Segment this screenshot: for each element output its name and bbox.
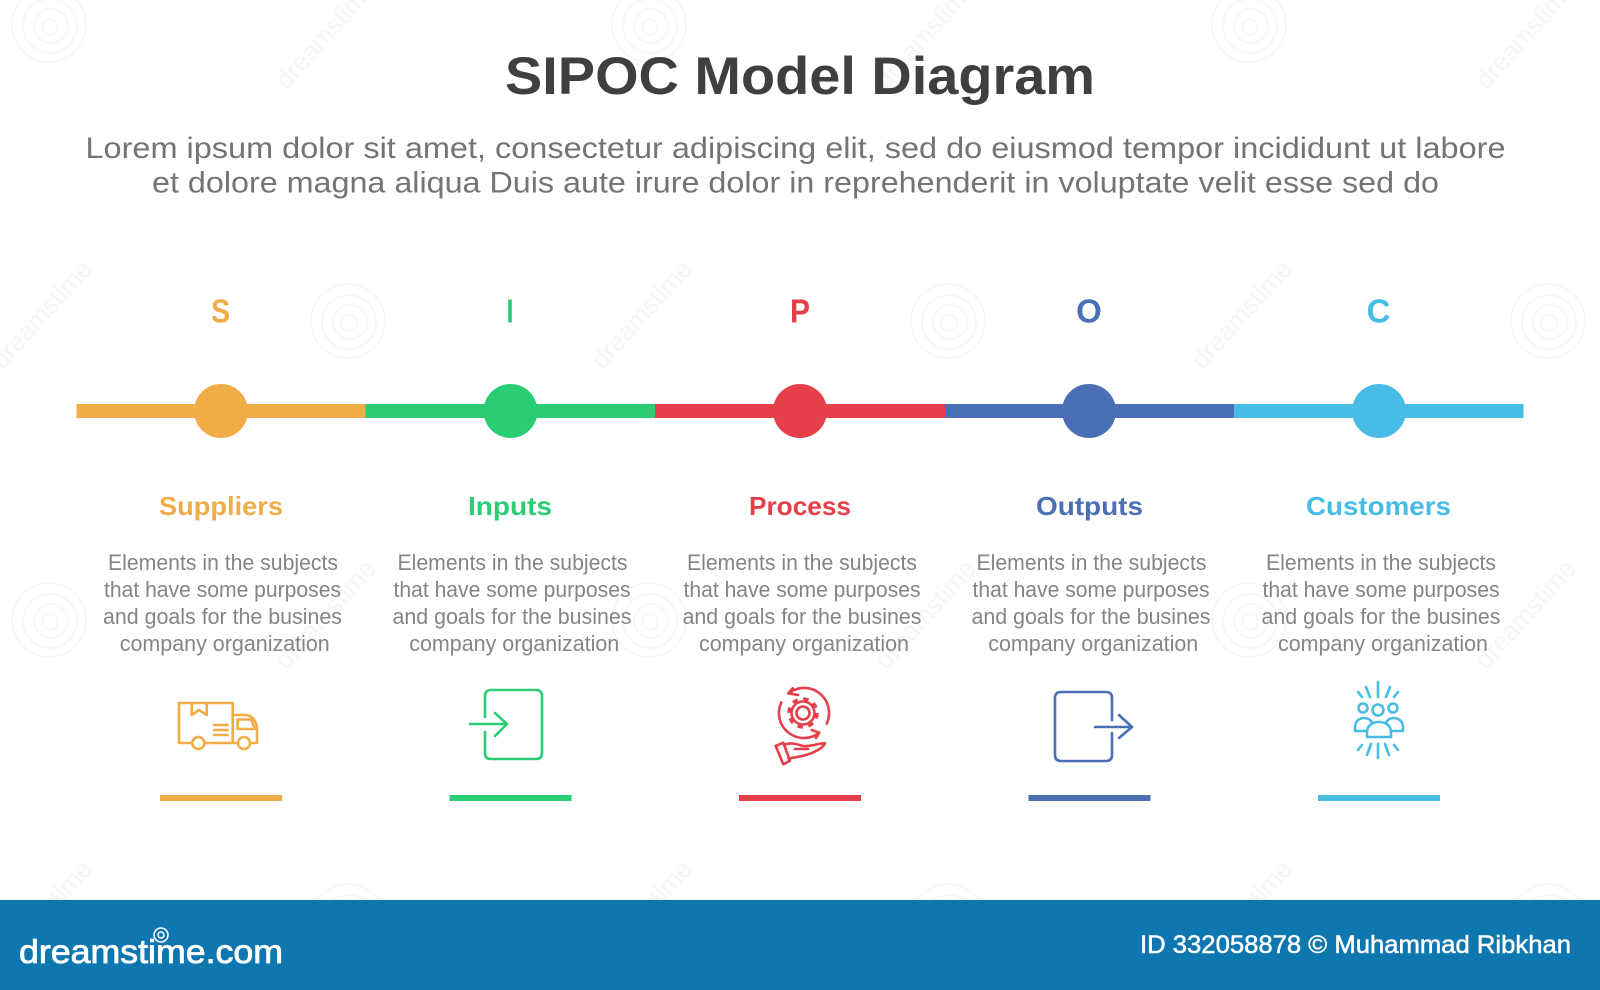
letter O: O	[1076, 292, 1102, 330]
watermark pattern: dreamstime	[1185, 253, 1298, 374]
heading: Suppliers: Suppliers	[159, 491, 283, 521]
title: SIPOC Model Diagram	[505, 47, 1095, 106]
subtitle text block: Lorem ipsum dolor sit amet, consectetur adipiscing elit, sed do eiusmod tempor incididunt ut labore	[86, 132, 1506, 165]
description: company organization	[1278, 631, 1488, 656]
icon: group of people with rays	[1355, 682, 1403, 758]
description: Elements in the subjects	[108, 550, 338, 575]
panel: customers	[1262, 292, 1500, 801]
description	[103, 550, 342, 656]
underline	[1318, 795, 1440, 801]
underline	[739, 795, 861, 801]
subtitle text block: et dolore magna aliqua Duis aute irure dolor in reprehenderit in voluptate velit esse sed do	[152, 166, 1439, 200]
underline	[1028, 795, 1150, 801]
description: and goals for the busines	[1262, 604, 1500, 629]
panel: outputs	[972, 292, 1210, 801]
description: company organization	[988, 631, 1198, 656]
watermark pattern: dreamstime	[585, 253, 698, 374]
watermark pattern: dreamstime	[269, 553, 382, 674]
description: company organization	[699, 631, 909, 656]
icon: brand spiral	[154, 928, 168, 942]
description: and goals for the busines	[392, 604, 632, 629]
description: company organization	[409, 631, 619, 656]
description: that have some purposes	[684, 577, 920, 602]
description: company organization	[120, 631, 330, 656]
icon: delivery truck	[179, 703, 257, 749]
panel: inputs	[392, 292, 632, 801]
description: that have some purposes	[104, 577, 341, 602]
heading: Inputs: Inputs	[468, 491, 552, 521]
icon: login arrow	[470, 690, 542, 759]
brand logo text: dreamstime.com	[19, 933, 283, 970]
description: that have some purposes	[394, 577, 630, 602]
description: Elements in the subjects	[398, 550, 628, 575]
description: and goals for the busines	[103, 604, 342, 629]
description: and goals for the busines	[682, 604, 922, 629]
description: Elements in the subjects	[976, 550, 1206, 575]
description	[972, 550, 1210, 656]
description: Elements in the subjects	[687, 550, 917, 575]
watermark pattern: dreamstime	[1469, 553, 1582, 674]
description: that have some purposes	[1262, 577, 1500, 602]
heading: Process: Process	[749, 491, 851, 521]
icon: gear and hand	[776, 688, 829, 764]
description	[682, 550, 922, 656]
watermark pattern: dreamstime	[1185, 853, 1298, 974]
watermark pattern: dreamstime	[869, 553, 982, 674]
letter I: I	[506, 292, 514, 330]
heading: Outputs: Outputs	[1036, 491, 1143, 521]
timeline	[76, 384, 1524, 438]
letter S: S	[211, 292, 230, 330]
watermark pattern: dreamstime	[585, 853, 698, 974]
image credit: ID 332058878 © Muhammad Ribkhan	[1140, 931, 1571, 959]
description: that have some purposes	[972, 577, 1210, 602]
description: and goals for the busines	[972, 604, 1210, 629]
icon: logout arrow	[1055, 692, 1132, 761]
footer bar	[0, 900, 1600, 990]
letter P: P	[790, 292, 810, 330]
panel: suppliers	[103, 292, 342, 801]
heading: Customers: Customers	[1306, 491, 1451, 521]
description	[392, 550, 632, 656]
description: Elements in the subjects	[1266, 550, 1496, 575]
underline	[160, 795, 282, 801]
description	[1262, 550, 1500, 656]
panel: process	[682, 292, 922, 801]
subtitle text block	[86, 132, 1506, 200]
letter C: C	[1367, 292, 1390, 330]
underline	[450, 795, 572, 801]
